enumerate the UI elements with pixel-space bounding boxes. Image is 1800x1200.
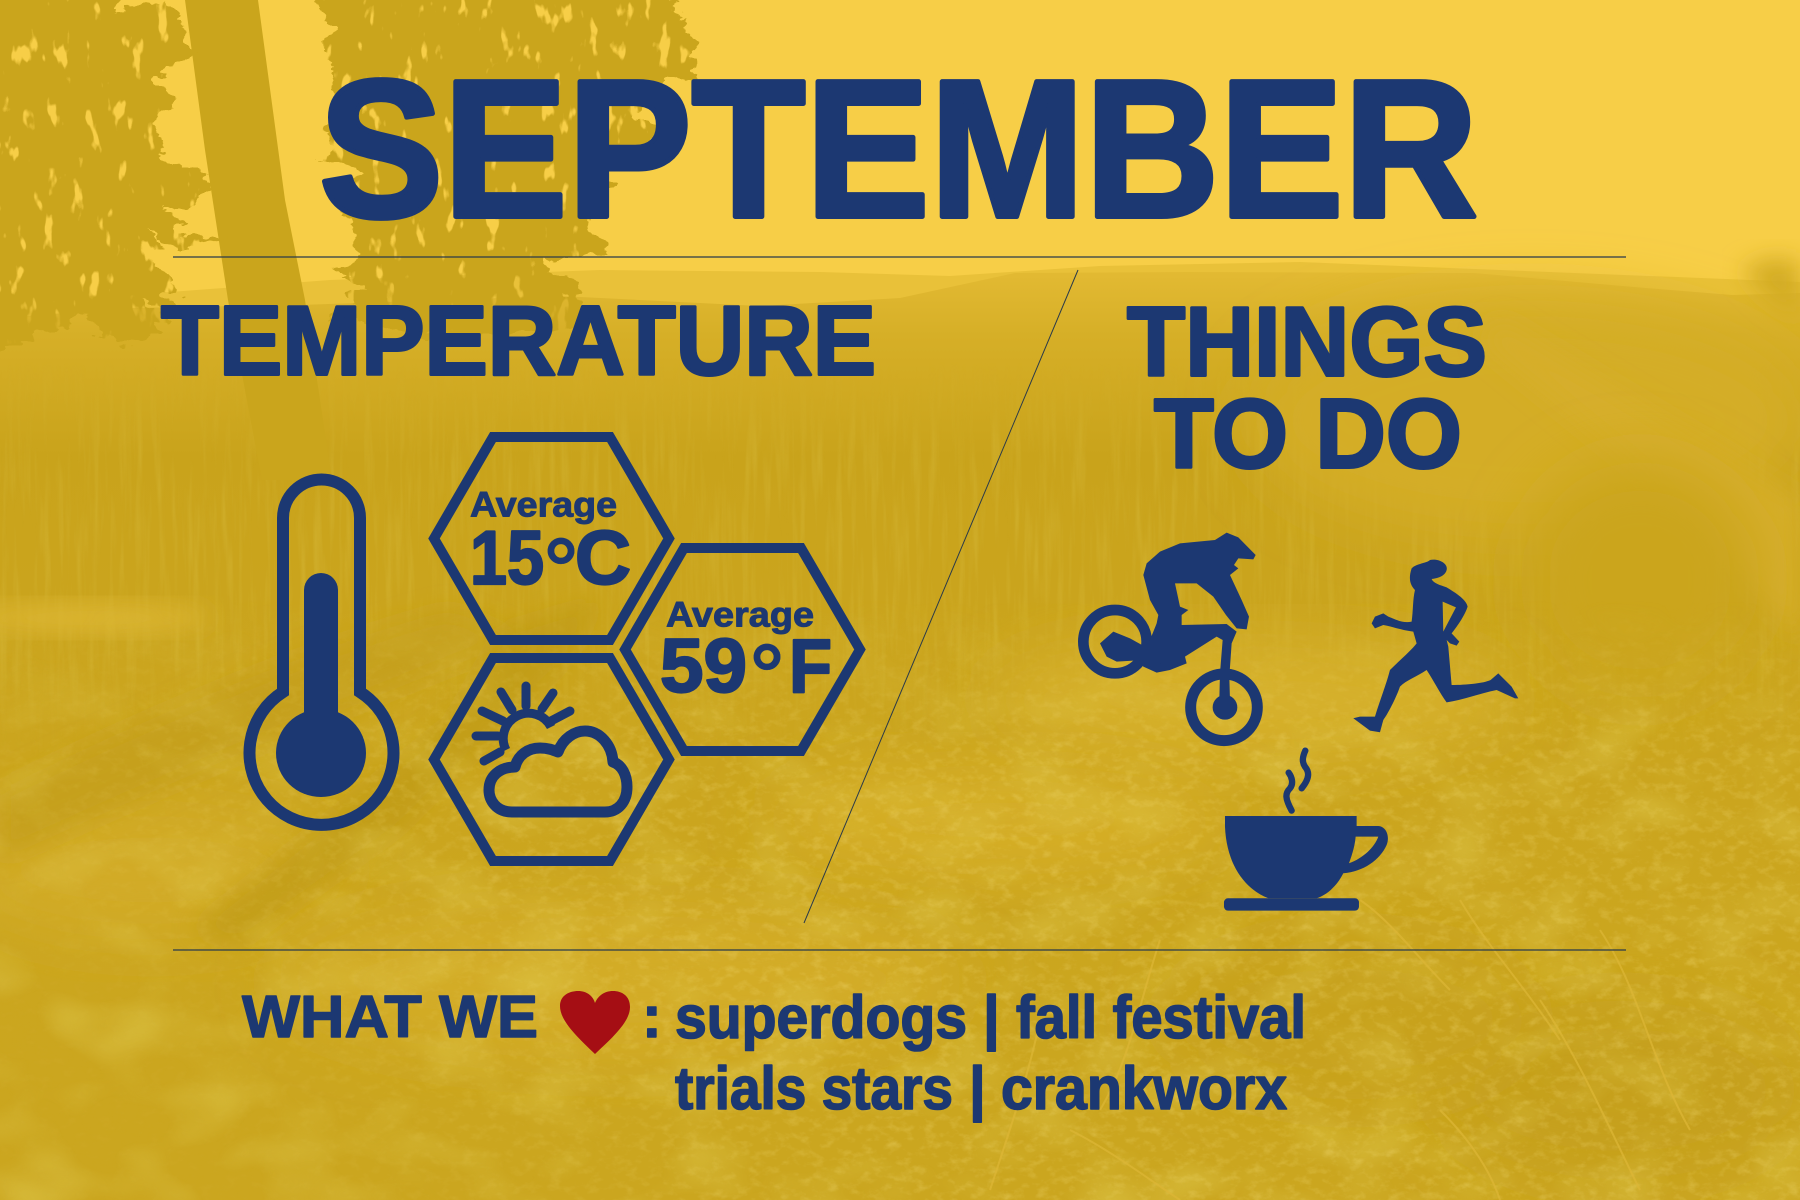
- list line 2: [675, 1055, 1287, 1123]
- label: what we: WHAT WE: [242, 984, 538, 1050]
- hexagon: average fahrenheit: F: [789, 624, 832, 709]
- icon: runner: [1353, 560, 1518, 732]
- title: SEPTEMBER: [319, 40, 1478, 258]
- heading: things to do: [1127, 286, 1487, 488]
- diagonal divider line: [804, 270, 1078, 923]
- hexagon: average celsius: 15: [470, 516, 544, 601]
- hexagon: average fahrenheit: °: [750, 627, 784, 722]
- dark trail and bike: [0, 610, 520, 860]
- list line 1: fall festival: [1016, 984, 1306, 1051]
- far-side treeline: [1740, 258, 1800, 320]
- hexagon: sun and cloud weather icon: [434, 658, 669, 861]
- hexagon: average celsius: Average: [470, 486, 617, 524]
- icon: mountain biker: [1083, 533, 1257, 741]
- heading: things to do: THINGS: [1127, 286, 1487, 396]
- list line 1: superdogs: [675, 984, 967, 1051]
- icon: coffee cup with steam: [1224, 751, 1388, 911]
- icon: heart: [560, 991, 630, 1054]
- hexagon: average celsius: [434, 437, 669, 640]
- dry grass stalks lower right: [990, 900, 1690, 1200]
- colon: :: [642, 984, 662, 1050]
- bottom divider line: [173, 949, 1626, 951]
- heading: temperature: TEMPERATURE: [161, 286, 876, 396]
- top divider line: [173, 256, 1626, 258]
- panel: what we love: [242, 984, 1306, 1123]
- hexagon: average celsius: C: [575, 516, 631, 601]
- lighter ski-run slope: [1250, 300, 1800, 540]
- list line 2: crankworx: [1001, 1055, 1287, 1122]
- hexagon: average fahrenheit: 59: [660, 624, 747, 709]
- icon: thermometer: [249, 480, 394, 825]
- hexagon: average celsius: °: [544, 521, 578, 616]
- list line 1: [675, 984, 1306, 1052]
- panel: temperature: [161, 286, 876, 861]
- hexagon: average fahrenheit: [625, 548, 860, 751]
- trees: [0, 0, 695, 480]
- list line 2: trials stars: [675, 1055, 953, 1122]
- foreground light patches: [0, 604, 210, 632]
- list line 1: |: [983, 984, 1000, 1052]
- hexagon: average fahrenheit: Average: [666, 596, 814, 634]
- list line 2: |: [969, 1055, 986, 1123]
- heading: things to do: TO DO: [1154, 378, 1462, 488]
- panel: things to do: [1083, 286, 1518, 911]
